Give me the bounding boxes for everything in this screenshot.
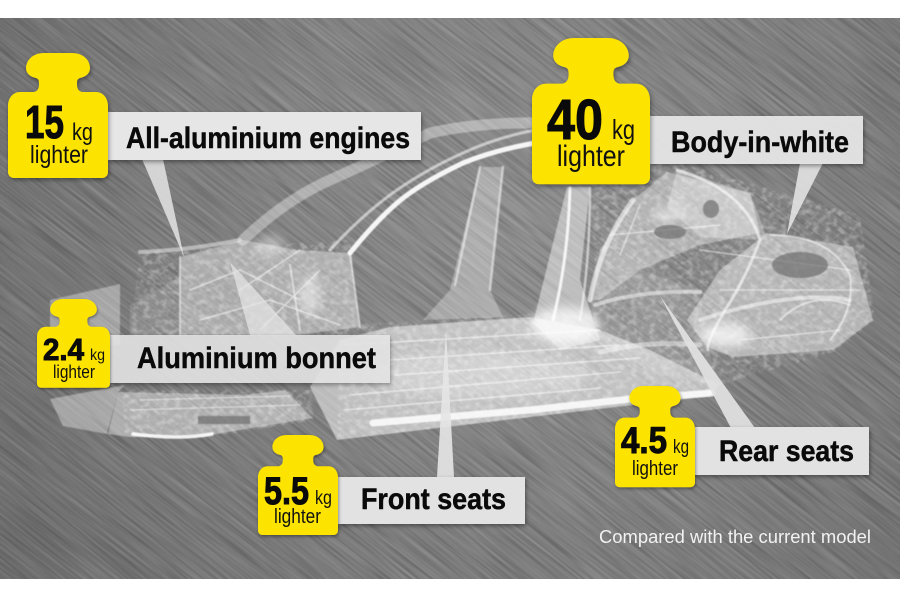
label text: bonnet: Aluminium bonnet [137,342,376,375]
value: 5.5 kg: 5.5 [264,470,309,513]
callout box: engines [108,112,421,160]
callout box: bonnet [110,335,390,383]
footnote: Compared with the current model [599,527,871,547]
label: all-aluminium engines [108,112,421,257]
label text: body: Body-in-white [671,126,849,159]
callout pointer: body [787,163,823,234]
callout box: body [650,116,863,164]
value: 2.4 kg: 2.4 [43,332,85,367]
callout pointer: bonnet [230,262,296,335]
callout pointer: engines [142,159,184,257]
icon: yellow weight 15 [8,53,108,178]
unit: kg: kg [673,437,689,458]
car: mottled stamped detail [122,160,875,440]
weight badge: 2.4 kg lighter [37,299,110,388]
icon: yellow weight 4.5 [615,386,695,487]
car: dark cut-outs [198,200,828,424]
label: rear seats [660,296,869,475]
unit: kg: kg [315,488,332,509]
value: 4.5 kg: 4.5 [621,420,667,461]
callout box: rear seats [695,427,869,475]
car: bright glows [256,207,751,397]
label: aluminium bonnet [110,262,390,383]
caption: lighter: lighter [53,362,95,382]
caption: lighter: lighter [557,140,625,173]
callout pointer: rear seats [660,296,755,428]
unit: kg: kg [72,119,93,146]
car: translucent body masses [50,167,873,440]
callout box: front seats [338,477,525,524]
car body structure x-ray [50,123,875,440]
callout pointer: front seats [437,330,454,477]
label text: rear seats: Rear seats [719,435,854,468]
label: front seats [338,330,525,524]
caption: lighter: lighter [632,458,678,480]
caption: lighter: lighter [274,506,321,528]
icon: yellow weight 5.5 [258,435,338,535]
value: 15 kg: 15 [25,96,64,148]
car: roof rails and pillars [130,123,860,437]
label text: engines: All-aluminium engines [126,122,410,155]
weight badge: 4.5 kg lighter [615,386,695,487]
unit: kg: kg [90,347,105,364]
label: body-in-white [650,116,863,234]
label text: front seats: Front seats [361,483,506,516]
value: 40 kg: 40 [547,88,603,152]
weight badge: 15 kg lighter [8,53,108,178]
caption: lighter: lighter [30,141,88,169]
weight badge: 40 kg lighter [532,38,650,184]
icon: yellow weight 2.4 [37,299,110,388]
unit: kg: kg [612,114,635,145]
weight badge: 5.5 kg lighter [258,435,338,535]
icon: yellow weight 40 [532,38,650,184]
